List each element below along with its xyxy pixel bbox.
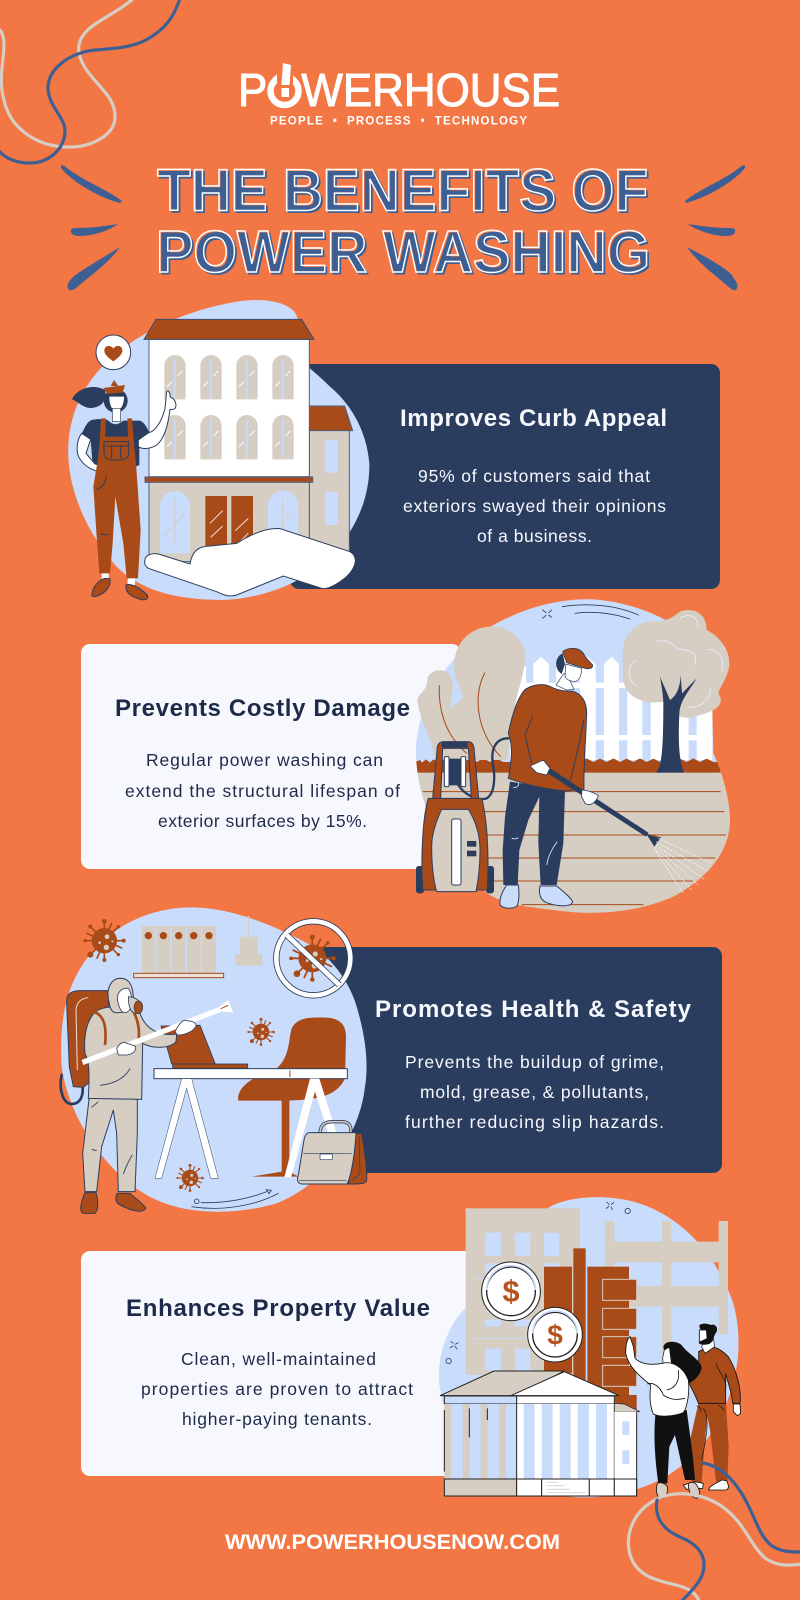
tree: [623, 610, 729, 773]
chair: [238, 1018, 346, 1177]
worker: [500, 648, 712, 908]
sparkles: [543, 605, 638, 619]
logo tagline: PEOPLE • PROCESS • TECHNOLOGY: [270, 116, 527, 128]
main building: [144, 319, 314, 562]
body copy: [141, 1349, 413, 1429]
scaffold frame: [605, 1221, 728, 1361]
body copy: higher-paying tenants.: [182, 1409, 372, 1429]
pressure washer: [416, 738, 508, 893]
title: THE BENEFITS OF: [157, 158, 648, 224]
viruses: [83, 919, 275, 1192]
body copy: Regular power washing can: [146, 750, 383, 770]
decorative curves top left: [0, 0, 180, 163]
title: POWER WASHING: [156, 219, 650, 285]
body copy: mold, grease, & pollutants,: [420, 1082, 649, 1102]
background building: [466, 1208, 580, 1375]
panel 4 text: [126, 1295, 430, 1429]
title: THE BENEFITS OF: [159, 160, 650, 226]
illustration: property value: [439, 1197, 741, 1498]
open hand: [145, 529, 355, 596]
panel: improves curb appeal: [290, 364, 720, 589]
heading: Improves Curb Appeal: [400, 405, 667, 432]
heading: Prevents Costly Damage: [115, 695, 410, 722]
decorative arcs: [192, 1192, 278, 1208]
body copy: [403, 466, 666, 546]
panel: promotes health and safety: [300, 947, 722, 1173]
icon: dollar coins: [482, 1262, 582, 1362]
icon: no virus sign: [276, 921, 350, 995]
panel: enhances property value: [81, 1251, 481, 1476]
side building: [309, 406, 353, 553]
body copy: exteriors swayed their opinions: [403, 496, 666, 516]
fence: [510, 657, 712, 760]
decorative curves bottom right: [628, 1463, 800, 1600]
body copy: properties are proven to attract: [141, 1379, 413, 1399]
panel 3 text: [375, 996, 692, 1132]
man: [683, 1324, 741, 1490]
deck lines: [423, 792, 726, 905]
body copy: 95% of customers said that: [418, 466, 650, 486]
desk: [154, 1069, 347, 1178]
briefcase: [297, 1122, 367, 1184]
body copy: [405, 1052, 664, 1132]
left bushes: [417, 626, 525, 760]
icon: dollar coins: $: [502, 1275, 520, 1309]
body copy: further reducing slip hazards.: [405, 1112, 664, 1132]
title: POWER WASHING: [158, 221, 652, 287]
rust tower: [544, 1248, 637, 1410]
icon: dollar coins: $: [547, 1319, 563, 1350]
title: [156, 158, 652, 287]
body copy: extend the structural lifespan of: [125, 781, 400, 801]
logo wordmark: POWERHOUSE: [238, 64, 560, 116]
body copy: Clean, well-maintained: [181, 1349, 376, 1369]
illustration: sanitising worker at desk: [61, 907, 367, 1213]
woman: [626, 1337, 702, 1498]
sanitising worker: [61, 978, 233, 1213]
heading: Promotes Health & Safety: [375, 996, 692, 1023]
pendant lamp: [235, 916, 262, 966]
illustration: man power washing: [416, 599, 730, 913]
panel 1 text: [400, 405, 667, 546]
panel 2 text: [115, 695, 410, 831]
body copy: Prevents the buildup of grime,: [405, 1052, 664, 1072]
icon: heart bubble: [96, 335, 131, 370]
logo: [238, 62, 560, 128]
woman: [72, 380, 176, 600]
website footer: WWW.POWERHOUSENOW.COM: [225, 1531, 560, 1554]
illustration: woman and building: [68, 300, 369, 600]
panel: prevents costly damage: [81, 644, 461, 869]
body copy: [125, 750, 400, 831]
laptop: [161, 1025, 215, 1064]
binders on shelf: [134, 926, 224, 978]
title burst marks: [61, 165, 745, 290]
heading: Enhances Property Value: [126, 1295, 430, 1322]
body copy: of a business.: [477, 526, 592, 546]
sparkles: [446, 1202, 630, 1364]
logo power symbol: [267, 62, 302, 108]
body copy: exterior surfaces by 15%.: [158, 811, 367, 831]
bank building: [440, 1371, 640, 1496]
